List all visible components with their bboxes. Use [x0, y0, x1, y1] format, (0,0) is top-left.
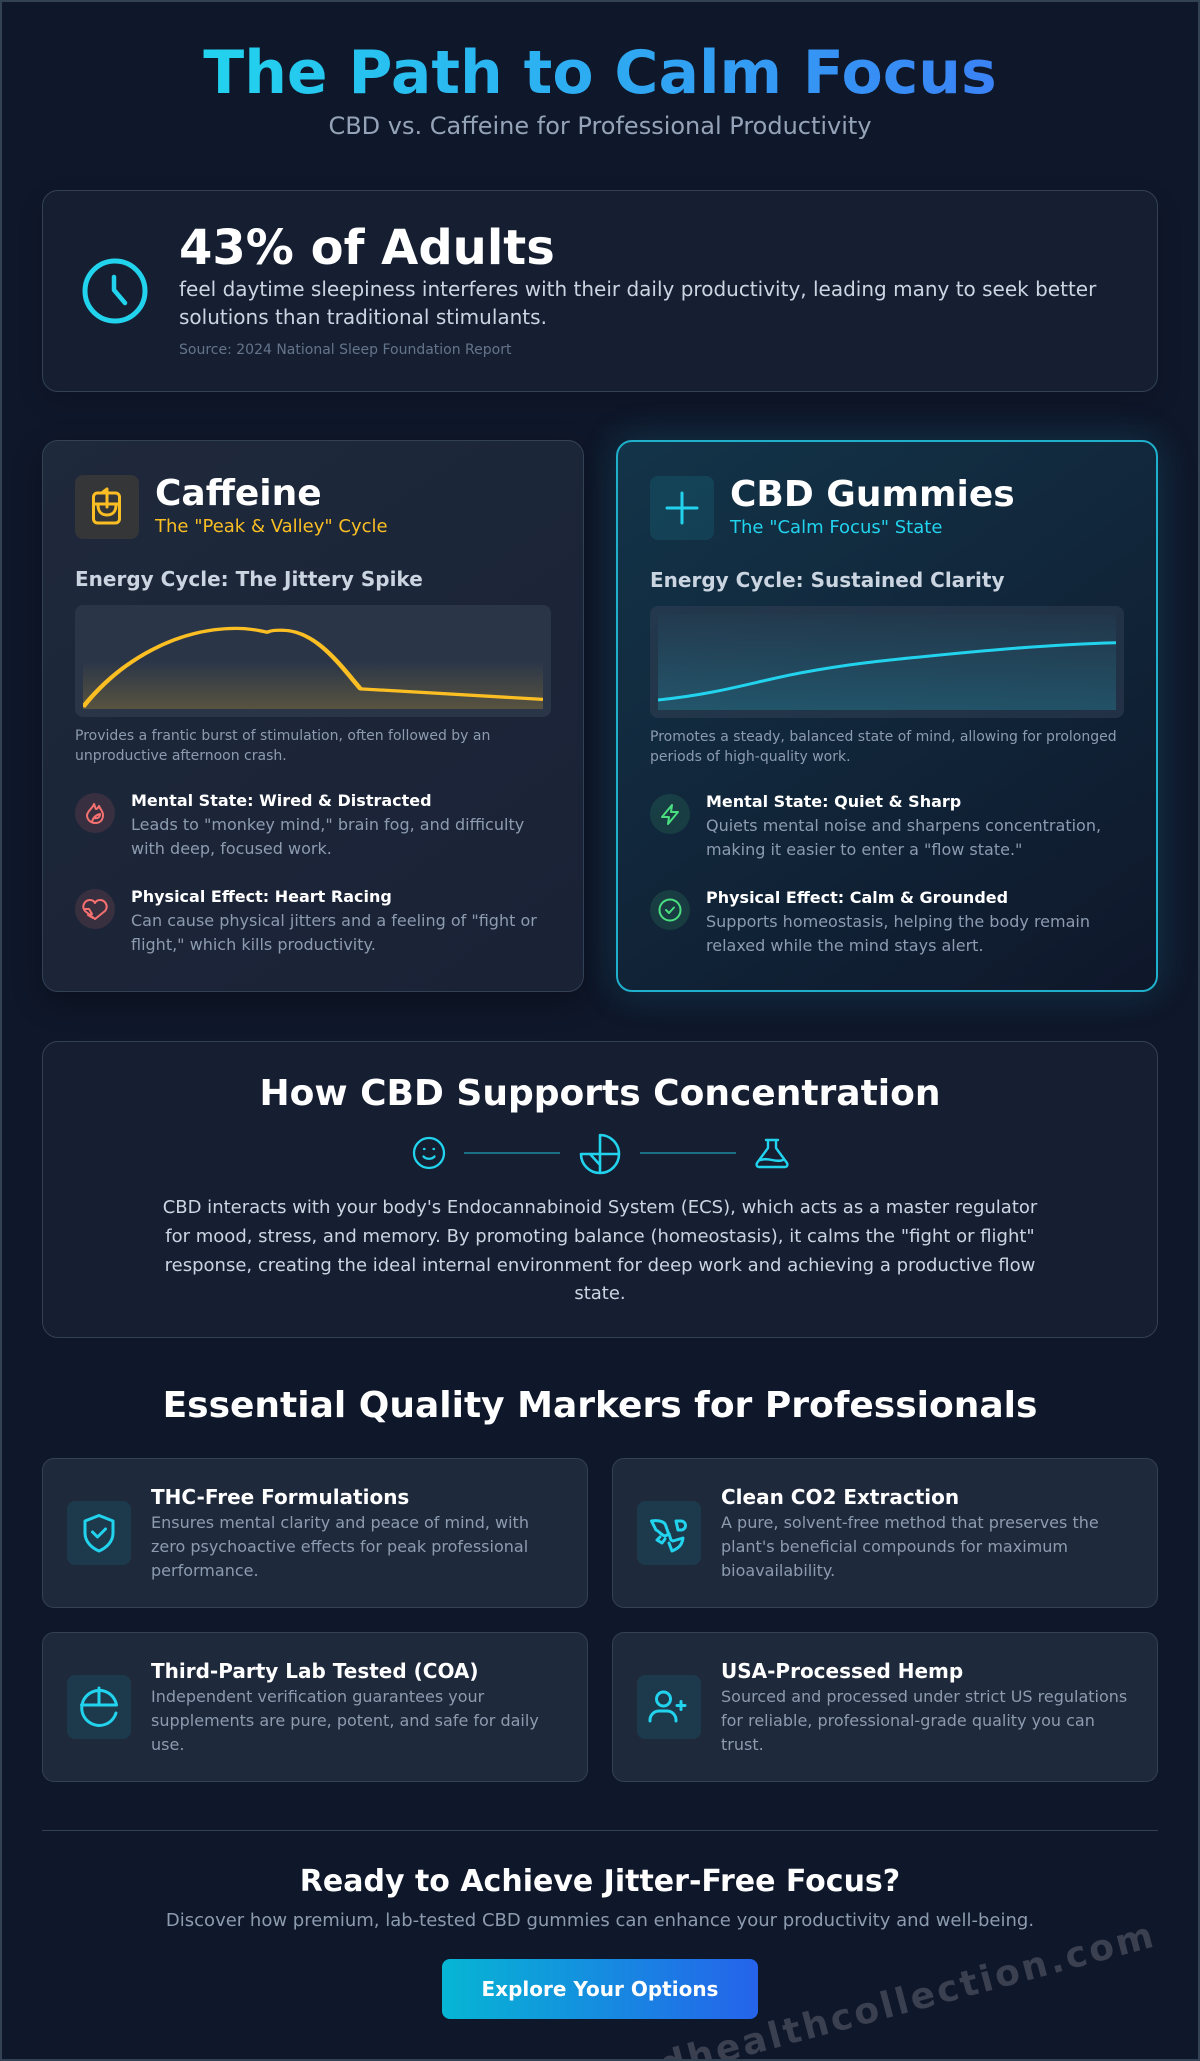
heading: quality markers: Essential Quality Markers for Professionals [163, 1385, 1037, 1426]
card: thc-free [42, 1458, 588, 1608]
header [203, 38, 997, 140]
explanation text: state. [574, 1283, 626, 1304]
card text: performance. [151, 1561, 259, 1580]
stat description: feel daytime sleepiness interferes with their daily productivity, leading many to seek better [179, 277, 1096, 301]
icon: plant segments [580, 1134, 620, 1174]
card title: Clean CO2 Extraction [721, 1485, 959, 1509]
text: mental state: making it easier to enter a "flow state." [706, 840, 1022, 859]
icon: pie [67, 1675, 131, 1739]
energy heading: Energy Cycle: The Jittery Spike [75, 567, 423, 591]
stat description: solutions than traditional stimulants. [179, 305, 547, 329]
card text: for reliable, professional-grade quality you can [721, 1711, 1095, 1730]
card text: A pure, solvent-free method that preserves the [721, 1513, 1099, 1532]
icon: check circle [650, 890, 690, 930]
card text [721, 1513, 1099, 1580]
cta button [442, 1959, 758, 2019]
item: physical effect [75, 887, 537, 954]
chart description: Promotes a steady, balanced state of mind, allowing for prolonged [650, 729, 1117, 745]
caffeine title: Caffeine [155, 473, 322, 514]
icon: bolt [650, 794, 690, 834]
card text [151, 1687, 539, 1754]
energy heading: Energy Cycle: Sustained Clarity [650, 568, 1004, 592]
explanation text [163, 1197, 1038, 1304]
text: mental state: with deep, focused work. [131, 839, 332, 858]
icon: shield [67, 1501, 131, 1565]
divider line [464, 1152, 560, 1154]
chart: jittery spike [75, 605, 551, 717]
card text: use. [151, 1735, 184, 1754]
text: physical effect: relaxed while the mind stays alert. [706, 936, 984, 955]
panel: cbd gummies [616, 440, 1158, 992]
cta text: Discover how premium, lab-tested CBD gummies can enhance your productivity and well-being. [166, 1910, 1034, 1931]
card text: supplements are pure, potent, and safe for daily [151, 1711, 539, 1730]
icon: heart [75, 889, 115, 929]
card title: THC-Free Formulations [151, 1485, 409, 1509]
card text: zero psychoactive effects for peak professional [151, 1537, 528, 1556]
icon: clock [82, 258, 148, 324]
card text: Independent verification guarantees your [151, 1687, 484, 1706]
item: physical effect [650, 888, 1090, 955]
text: physical effect: flight," which kills productivity. [131, 935, 376, 954]
text: physical effect [706, 888, 1090, 955]
explanation text: for mood, stress, and memory. By promoting balance (homeostasis), it calms the "fight or flight" [165, 1226, 1035, 1247]
chart description [75, 728, 490, 764]
text: mental state: Leads to "monkey mind," brain fog, and difficulty [131, 815, 524, 834]
icon row [412, 1134, 789, 1174]
item: mental state [650, 792, 1101, 859]
panel: caffeine [42, 440, 584, 992]
chart description: periods of high-quality work. [650, 749, 851, 765]
card text [721, 1687, 1127, 1754]
caffeine subtitle: The "Peak & Valley" Cycle [155, 516, 388, 537]
card: usa hemp [612, 1632, 1158, 1782]
card title: Third-Party Lab Tested (COA) [151, 1659, 479, 1683]
icon: plus [650, 476, 714, 540]
stat headline: 43% of Adults [179, 220, 555, 276]
stat description [179, 277, 1096, 329]
item: mental state [75, 791, 524, 858]
title: The Path to Calm Focus [203, 38, 997, 108]
divider line [640, 1152, 736, 1154]
cbd subtitle: The "Calm Focus" State [730, 517, 942, 538]
card: lab tested [42, 1632, 588, 1782]
card text: trust. [721, 1735, 764, 1754]
card title: USA-Processed Hemp [721, 1659, 963, 1683]
icon: flame [75, 793, 115, 833]
chart: sustained clarity [650, 606, 1124, 718]
icon: caffeine [75, 475, 139, 539]
text: physical effect [131, 887, 537, 954]
text: mental state: Mental State: Wired & Distracted [131, 791, 432, 810]
text: physical effect: Can cause physical jitters and a feeling of "fight or [131, 911, 537, 930]
panel: statistic [42, 190, 1158, 392]
text: mental state [131, 791, 524, 858]
card: co2 extraction [612, 1458, 1158, 1608]
chart description: unproductive afternoon crash. [75, 748, 287, 764]
icon: flask [755, 1138, 789, 1168]
text: physical effect: Physical Effect: Heart Racing [131, 887, 392, 906]
text: physical effect: Physical Effect: Calm & Grounded [706, 888, 1008, 907]
card text: Ensures mental clarity and peace of mind, with [151, 1513, 529, 1532]
card text: plant's beneficial compounds for maximum [721, 1537, 1068, 1556]
call to action [166, 1864, 1034, 2019]
panel: how cbd supports concentration [42, 1041, 1158, 1338]
cta button: Explore Your Options [482, 1977, 718, 2001]
text: mental state: Mental State: Quiet & Sharp [706, 792, 961, 811]
cta heading: Ready to Achieve Jitter-Free Focus? [300, 1864, 900, 1899]
explanation text: CBD interacts with your body's Endocannabinoid System (ECS), which acts as a master regulator [163, 1197, 1037, 1218]
icon: smile [412, 1136, 446, 1170]
cbd title: CBD Gummies [730, 474, 1015, 515]
card text: bioavailability. [721, 1561, 835, 1580]
section heading: How CBD Supports Concentration [259, 1073, 940, 1114]
subtitle: CBD vs. Caffeine for Professional Productivity [328, 112, 872, 140]
icon: leaf [637, 1501, 701, 1565]
chart description [650, 729, 1117, 765]
text: mental state [706, 792, 1101, 859]
text: mental state: Quiets mental noise and sharpens concentration, [706, 816, 1101, 835]
card text: Sourced and processed under strict US regulations [721, 1687, 1127, 1706]
icon: user plus [637, 1675, 701, 1739]
text: physical effect: Supports homeostasis, helping the body remain [706, 912, 1090, 931]
chart description: Provides a frantic burst of stimulation, often followed by an [75, 728, 490, 744]
source: Source: 2024 National Sleep Foundation Report [179, 342, 511, 358]
explanation text: response, creating the ideal internal environment for deep work and achieving a productive flow [165, 1255, 1035, 1276]
card text [151, 1513, 529, 1580]
